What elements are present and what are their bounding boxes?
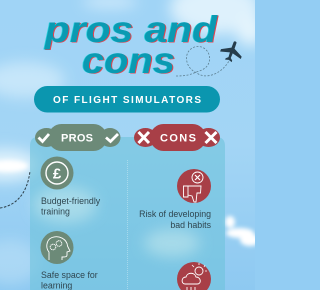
cons badge: CONS	[160, 132, 196, 144]
title: pros and cons: cons	[83, 40, 176, 82]
subtitle pill: OF FLIGHT SIMULATORS	[53, 95, 201, 106]
con item: risk of developing bad habits	[139, 169, 212, 230]
subtitle pill	[34, 86, 220, 112]
cons badge	[134, 124, 220, 151]
pros badge	[35, 124, 120, 151]
title: pros and cons: cons	[82, 40, 175, 81]
pros badge: PROS	[61, 132, 93, 144]
title: pros and cons: cons	[81, 40, 174, 81]
con item: risk of developing bad habits: bad habits	[170, 220, 212, 230]
con item: weather	[177, 262, 211, 290]
pro item: safe space for learning: Safe space for	[41, 270, 98, 280]
icon: pound coin: £	[53, 166, 62, 182]
pro item: budget-friendly training	[40, 156, 101, 216]
icon: cloud with sun and rain	[177, 262, 211, 290]
icon: cross right	[206, 132, 216, 143]
title: pros and cons: pros and	[45, 10, 220, 50]
pro item: budget-friendly training: training	[41, 206, 70, 216]
panel: translucent content background	[30, 137, 225, 290]
con item: risk of developing bad habits: Risk of developing	[139, 209, 211, 219]
dashed flight path	[176, 47, 229, 76]
icon: check right	[106, 134, 118, 142]
title: pros and cons: pros and	[44, 9, 219, 50]
dashed flight path left	[0, 171, 30, 208]
pro item: safe space for learning	[40, 231, 98, 290]
icon: cross left	[138, 132, 149, 143]
title: pros and cons	[43, 9, 220, 82]
pro item: budget-friendly training: Budget-friendly	[41, 196, 101, 206]
icon: airplane	[218, 38, 246, 65]
title: pros and cons: pros and	[43, 9, 218, 50]
infographic canvas	[0, 0, 255, 290]
icon: head with gears	[40, 231, 74, 264]
icon: thumbs down with cross	[177, 169, 211, 203]
icon: check left	[38, 134, 49, 142]
